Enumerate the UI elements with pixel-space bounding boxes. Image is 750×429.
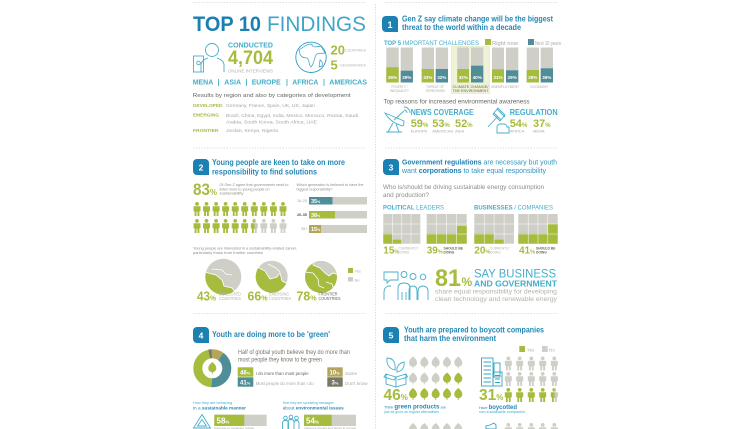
region list: | xyxy=(286,80,288,87)
regulation stats: 37% xyxy=(533,118,551,130)
waffle: businesses: BUSINESSES / COMPANIES xyxy=(474,206,553,212)
development categories: Results by region and also by categories of development xyxy=(193,93,351,99)
waffle: political leaders: DOING xyxy=(398,250,410,254)
sustainable behaviour block: in a sustainable manner xyxy=(193,406,246,410)
news coverage stats: ASIA xyxy=(455,128,464,134)
green products text xyxy=(383,404,447,414)
heading: that harm the environment xyxy=(404,333,496,343)
heading: Young people are keen to take on more xyxy=(212,157,345,167)
boycotted text: non-sustainable companies xyxy=(479,410,525,414)
stat 81% callout: SAY BUSINESS xyxy=(474,269,556,281)
subheading: Top reasons for increased environmental awareness xyxy=(384,100,530,106)
waffle: political leaders: POLITICAL LEADERS xyxy=(383,206,444,212)
bar chart: generation responsibility: 15% xyxy=(311,227,321,233)
legend xyxy=(519,346,555,352)
waffle: political leaders: SHOULD BE xyxy=(444,246,464,250)
badge 5: 5 xyxy=(389,330,394,340)
text block: Half of global youth believe they do more than xyxy=(238,349,350,356)
waffle: businesses: SHOULD BE xyxy=(536,246,556,250)
waffle: political leaders xyxy=(383,206,467,257)
legend chips: 3% xyxy=(332,380,339,386)
career percentages: 78% xyxy=(296,288,317,304)
bar chart: challenges: 36% xyxy=(542,75,551,80)
regulation stats xyxy=(510,107,558,134)
region list: | xyxy=(323,80,325,87)
bar chart: challenges: 29% xyxy=(508,75,517,80)
countries and geographies stat xyxy=(330,42,367,72)
icon: group of people with speech bubble xyxy=(384,272,428,300)
news coverage stats: 52% xyxy=(455,118,473,130)
icon: globe xyxy=(296,42,326,72)
question: Which generation is believed to have the xyxy=(296,182,364,187)
icon: leaf xyxy=(208,362,216,374)
regulation stats: AFRICA xyxy=(510,128,525,134)
bar chart: challenges: POVERTY / xyxy=(392,85,408,89)
waffle: businesses: CURRENTLY xyxy=(490,246,511,250)
panel: finding 3 government regulations xyxy=(383,158,558,303)
sustainable behaviour block: How they are behaving xyxy=(193,400,232,405)
stat 31%: 31% xyxy=(479,387,503,404)
interviews stat xyxy=(228,40,274,74)
career percentages: DEVELOPED xyxy=(219,292,241,296)
stat description xyxy=(220,182,288,196)
icon: satellite dish xyxy=(385,107,410,132)
career percentages: COUNTRIES xyxy=(318,296,341,301)
legend: No xyxy=(354,278,359,282)
environmental messages block: about environmental issues xyxy=(283,406,344,410)
development categories: FRONTIER xyxy=(193,128,219,133)
heading xyxy=(212,157,345,176)
career percentages: COUNTRIES xyxy=(269,296,291,301)
pie map: frontier xyxy=(305,261,337,293)
bar chart: challenges: THREAT OF xyxy=(426,85,445,89)
career text: Young people are interested in a sustainability-related career, xyxy=(193,246,297,250)
icon: interviewee at a screen xyxy=(194,44,224,72)
panel: finding 1 climate change xyxy=(382,14,561,134)
icon: cut-off bottom icon xyxy=(486,423,496,429)
title: TOP 10 xyxy=(193,12,261,36)
development categories: DEVELOPED xyxy=(193,103,223,108)
bar chart: challenges xyxy=(386,48,553,93)
legend chips: 46% xyxy=(240,370,251,376)
heading: Gen Z say climate change will be the biggest xyxy=(402,14,553,24)
countries and geographies stat: 5 xyxy=(330,57,338,72)
legend chips: 10% xyxy=(330,370,340,376)
news coverage stats: NEWS COVERAGE xyxy=(411,107,474,117)
region list: AMERICAS xyxy=(329,80,367,87)
stat 81% callout xyxy=(435,265,558,303)
heading: Government regulations are necessary but youth xyxy=(402,158,557,166)
region list: | xyxy=(246,80,248,87)
news coverage stats: AMERICAS xyxy=(432,128,454,134)
bar chart: challenges: 29% xyxy=(528,75,537,80)
icon: gavel xyxy=(488,108,509,133)
waffle: businesses: DOING xyxy=(536,250,547,254)
regulation stats: MENA xyxy=(533,128,545,134)
interviews stat: ONLINE INTERVIEWS xyxy=(228,68,273,74)
sustainable behaviour block: 58% xyxy=(216,417,229,426)
legend chips xyxy=(238,367,368,387)
career percentages: 43% xyxy=(197,288,216,304)
badge 3: 3 xyxy=(389,162,394,172)
interviews stat: CONDUCTED xyxy=(228,40,274,49)
news coverage stats: EUROPE xyxy=(411,128,428,134)
environmental messages block: How they are spreading messages xyxy=(283,400,334,405)
waffle: businesses: 41% xyxy=(519,246,535,257)
question xyxy=(383,185,544,199)
chart title: TOP 5 IMPORTANT CHALLENGES xyxy=(384,40,480,47)
heading: Youth are doing more to be 'green' xyxy=(212,329,330,339)
career text: particularly those from frontier countries xyxy=(193,250,263,255)
pie map: emerging xyxy=(256,260,288,293)
interviews stat: 4,704 xyxy=(228,47,273,69)
development categories xyxy=(193,93,358,133)
highlight: climate change column xyxy=(452,46,490,94)
bar chart: generation responsibility xyxy=(297,197,367,233)
pictogram: leaves xyxy=(409,356,462,429)
career percentages: EMERGING xyxy=(269,292,290,296)
sustainable behaviour block xyxy=(193,400,267,429)
text block: most people they know to be green xyxy=(238,357,322,364)
legend: Right now xyxy=(492,41,518,47)
career percentages xyxy=(197,288,341,304)
development categories: Brazil, China, Egypt, India, Mexico, Morocco, Russia, Saudi xyxy=(226,113,358,118)
stat 81% callout: 81 xyxy=(435,265,461,292)
countries and geographies stat: COUNTRIES xyxy=(345,48,367,52)
regulation stats: REGULATION xyxy=(510,107,558,117)
text block xyxy=(238,349,350,364)
bar chart: challenges: 33% xyxy=(423,75,432,80)
heading xyxy=(404,324,544,343)
region list: EUROPE xyxy=(252,80,281,87)
career text xyxy=(193,246,297,255)
stat description: Of Gen Z agree that governments need to xyxy=(220,182,288,187)
legend chips: Same xyxy=(345,371,357,376)
countries and geographies stat: 20 xyxy=(330,42,345,57)
development categories: Jordan, Kenya, Nigeria xyxy=(226,128,278,133)
heading: want corporations to take equal responsibility xyxy=(401,166,546,175)
environmental messages block: 54% xyxy=(306,417,319,426)
boycotted text: Have boycotted xyxy=(479,404,517,411)
regulation stats: 54% xyxy=(510,118,528,130)
question: biggest responsibility? xyxy=(296,186,333,192)
stat 81% callout: clean technology and renewable energy xyxy=(435,297,557,303)
bar chart: challenges: 32% xyxy=(437,75,446,80)
legend: Yes xyxy=(354,268,361,274)
question: Who is/should be driving sustainable energy consumption xyxy=(383,185,544,191)
region list: MENA xyxy=(193,80,213,87)
question xyxy=(296,182,364,192)
bar chart: generation responsibility: 38% xyxy=(311,213,321,219)
stat 81% callout: share equal responsibility for developing xyxy=(435,290,557,296)
region list: ASIA xyxy=(224,80,241,87)
bar chart: challenges: 31% xyxy=(493,75,503,80)
badge 4: 4 xyxy=(199,330,204,340)
heading xyxy=(401,158,557,175)
question: and production? xyxy=(383,193,430,199)
legend chips: Don't know xyxy=(345,381,368,386)
bar chart: challenges: ECONOMY xyxy=(530,85,549,89)
title second word: FINDINGS xyxy=(267,12,366,36)
bar chart: challenges: 32% xyxy=(459,75,468,80)
bar chart: challenges: 40% xyxy=(473,75,482,80)
development categories: Germany, France, Spain, UK, US, Japan xyxy=(226,103,315,108)
badge 2: 2 xyxy=(199,162,204,172)
development categories: EMERGING xyxy=(193,113,219,118)
countries and geographies stat: GEOGRAPHIES xyxy=(340,64,367,68)
bar chart: challenges: THE ENVIRONMENT xyxy=(452,89,489,93)
stat 81% callout: % xyxy=(462,275,472,289)
career percentages: COUNTRIES xyxy=(219,296,241,301)
badge 4 xyxy=(193,327,209,343)
waffle: businesses xyxy=(474,206,558,257)
stat 81% callout: AND GOVERNMENT xyxy=(474,279,558,289)
stat 83%: 83% xyxy=(193,181,217,199)
news coverage stats xyxy=(411,107,474,134)
career percentages: 66% xyxy=(248,288,268,304)
legend: Next 10 years xyxy=(535,41,561,47)
legend: No xyxy=(549,348,555,352)
boycotted text xyxy=(479,404,525,414)
stat description: sustainability xyxy=(220,191,244,196)
panel: finding 2 young people xyxy=(193,157,367,304)
bar chart: generation responsibility: 35% xyxy=(311,199,321,205)
region list: AFRICA xyxy=(292,80,318,87)
legend: Yes xyxy=(527,348,535,352)
panel: finding 4 youth going green xyxy=(193,327,368,429)
development categories: Arabia, South Korea, South Africa, UAE xyxy=(226,120,317,125)
waffle: businesses: 20% xyxy=(474,246,490,257)
bar chart: generation responsibility: 26-35 xyxy=(297,212,308,217)
waffle: political leaders: 15% xyxy=(383,246,399,257)
icon: plant in box xyxy=(384,358,408,387)
pictogram: people xyxy=(505,356,558,429)
pictogram: 83 percent of people xyxy=(194,202,286,233)
career percentages: FRONTIER xyxy=(318,292,338,296)
green products text: Think green products are xyxy=(384,404,447,410)
stat 46%: 46% xyxy=(384,387,408,404)
legend chips: I do more than most people xyxy=(256,371,309,376)
bar chart: challenges: UNEMPLOYMENT xyxy=(491,85,520,89)
news coverage stats: 59% xyxy=(411,118,429,130)
waffle: political leaders: 39% xyxy=(427,246,443,257)
badge 3 xyxy=(383,159,399,175)
bar chart: generation responsibility: 35+ xyxy=(301,226,308,231)
bar chart: challenges: 29% xyxy=(402,75,411,80)
badge 5 xyxy=(383,327,399,343)
green products text: just as good as regular alternatives xyxy=(383,410,439,414)
waffle: political leaders: DOING xyxy=(444,250,455,254)
bar chart: challenges: CLIMATE CHANGE/ xyxy=(452,85,490,89)
icon: buildings xyxy=(482,358,502,386)
legend chips: 41% xyxy=(240,380,251,386)
bar chart: generation responsibility: 16-25 xyxy=(297,198,307,203)
bar chart: challenges: INEQUALITY xyxy=(390,89,409,93)
panel: finding 5 boycott xyxy=(383,324,558,429)
news coverage stats: 53% xyxy=(432,118,451,130)
waffle: political leaders: CURRENTLY xyxy=(398,246,419,250)
pie map: developed xyxy=(205,258,242,295)
stat description: listen more to young people on xyxy=(220,186,270,191)
bar chart: challenges: TERRORISM xyxy=(426,89,444,93)
legend xyxy=(485,39,561,47)
heading: responsibility to find solutions xyxy=(212,166,317,176)
donut chart xyxy=(198,354,227,383)
badge 1 xyxy=(382,16,398,32)
legend xyxy=(348,268,361,282)
region list xyxy=(193,80,367,87)
badge 1: 1 xyxy=(387,20,393,30)
bar chart: challenges: 36% xyxy=(388,75,397,80)
heading xyxy=(402,14,553,32)
heading: Youth are prepared to boycott companies xyxy=(404,324,544,334)
legend chips: Most people do more than I do xyxy=(256,381,314,386)
environmental messages block xyxy=(282,400,356,429)
waffle: businesses: DOING xyxy=(490,250,501,254)
heading: threat to the world within a decade xyxy=(402,22,521,32)
panel: top 10 findings overview xyxy=(193,12,367,133)
badge 2 xyxy=(193,159,209,175)
region list: | xyxy=(218,80,220,87)
